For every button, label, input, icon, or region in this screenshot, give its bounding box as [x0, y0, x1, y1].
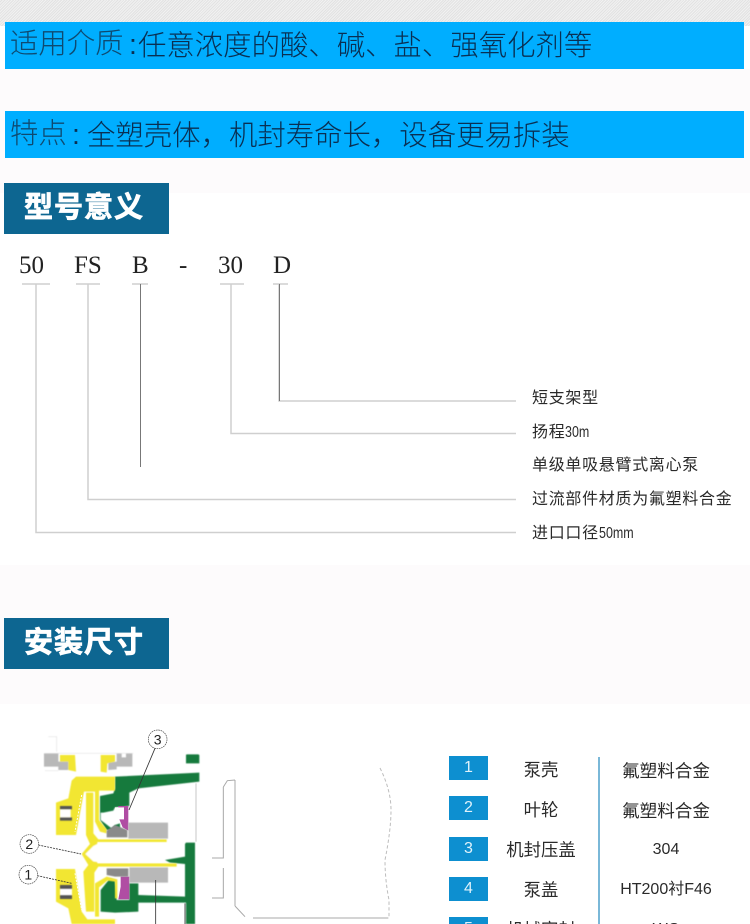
name 2: 叶轮	[524, 800, 558, 820]
label: wetted part material: 过流部件材质为氟塑料合金	[532, 491, 732, 508]
pump cross-section drawing	[18, 730, 392, 924]
label: inlet diameter: 50mm	[599, 525, 633, 542]
badge 1	[449, 756, 488, 780]
badge 2	[449, 796, 488, 820]
grey mechanical seal parts	[107, 823, 168, 883]
badge 3: 3	[464, 840, 473, 857]
code: D: D	[273, 252, 291, 279]
badge 3	[449, 837, 488, 861]
banner text: feature list: 全塑壳体，机封寿命长，设备更易拆装	[87, 120, 570, 152]
leader lines	[37, 748, 185, 924]
label: inlet diameter: 进口口径	[532, 525, 599, 542]
label: inlet diameter	[532, 524, 633, 542]
yellow pump casing	[56, 777, 117, 924]
casing bolts	[60, 806, 72, 899]
heading: model meaning: 型号意义	[24, 192, 144, 224]
badge 4	[449, 877, 488, 901]
banner colon: :	[129, 29, 137, 61]
seal bolt hole	[103, 807, 124, 819]
badge 1: 1	[464, 759, 473, 776]
heading: model meaning	[4, 183, 169, 234]
name 3: 机封压盖	[506, 840, 576, 860]
heading: installation dimensions	[4, 618, 169, 669]
model code diagram	[19, 252, 732, 542]
label: head 30m	[532, 424, 590, 441]
value 3: 304	[653, 841, 679, 858]
badge 2: 2	[464, 799, 473, 816]
badge 5	[449, 917, 488, 924]
motor bracket outline	[196, 768, 391, 918]
value 4: HT200衬F46	[620, 881, 712, 898]
banner: applicable media	[5, 22, 744, 69]
banner text: media list: 任意浓度的酸、碱、盐、强氧化剂等	[138, 30, 592, 62]
heading: installation dimensions: 安装尺寸	[24, 627, 144, 659]
value 1: 氟塑料合金	[622, 761, 710, 781]
casing vane dashes	[75, 795, 82, 910]
green pump cover	[100, 754, 199, 924]
label: head 30m: 扬程	[532, 424, 565, 441]
purple seal gland	[118, 806, 129, 899]
callout 2: 2	[25, 836, 33, 852]
value 2: 氟塑料合金	[622, 801, 710, 821]
banner label: applicable media: 适用介质	[10, 28, 124, 60]
banner colon: :	[72, 119, 80, 151]
impeller	[82, 793, 177, 912]
name 4: 泵盖	[524, 880, 558, 900]
code: B: B	[132, 252, 149, 279]
callout 1: 1	[24, 867, 32, 883]
name 1: 泵壳	[524, 760, 558, 780]
model code leader lines	[22, 283, 516, 534]
flange top detail	[44, 737, 133, 773]
callout 1	[19, 865, 38, 884]
code: 30: 30	[218, 252, 243, 279]
table divider	[598, 757, 600, 924]
code: dash: -	[179, 252, 187, 279]
badge 4: 4	[464, 880, 473, 897]
label: pump type: 单级单吸悬臂式离心泵	[532, 457, 699, 474]
callout 3	[148, 730, 167, 749]
callout 3: 3	[154, 731, 162, 747]
parts table	[449, 756, 712, 924]
label: short bracket type: 短支架型	[532, 390, 599, 407]
banner label: features: 特点	[10, 118, 67, 150]
code: FS: FS	[74, 252, 102, 279]
code: 50: 50	[19, 252, 44, 279]
callout 2	[20, 835, 39, 853]
label: head 30m: 30m	[565, 424, 590, 441]
banner: features	[5, 111, 744, 158]
